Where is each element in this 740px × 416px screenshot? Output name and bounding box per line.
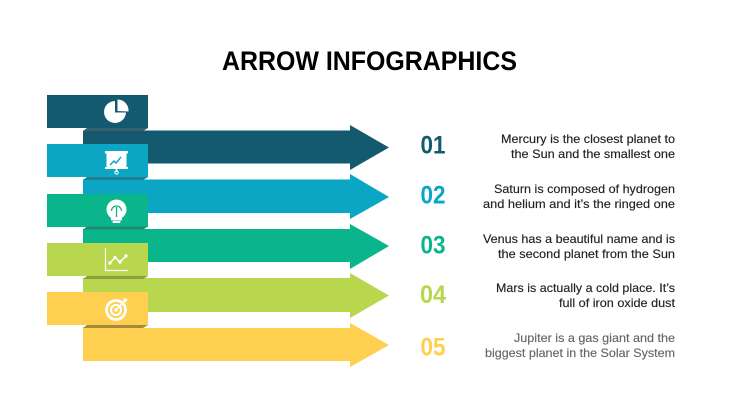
icon: brain bulb [106, 200, 126, 223]
number 03: 03 [420, 232, 446, 260]
tab 3 [47, 194, 148, 230]
description 5: Jupiter is a gas giant and the [514, 331, 675, 345]
icon: pie chart [104, 99, 129, 123]
icon: target [106, 298, 128, 320]
arrow 2 [83, 174, 389, 219]
description 3 [483, 232, 675, 261]
description 1: the Sun and the smallest one [511, 147, 675, 161]
arrow 4 [83, 273, 389, 318]
arrow 3 [83, 224, 389, 269]
tab 1 [47, 95, 148, 131]
tab 2 [47, 144, 148, 180]
description 4 [496, 281, 676, 310]
arrow 5 [83, 323, 389, 367]
description 4: full of iron oxide dust [559, 296, 676, 310]
title: ARROW INFOGRAPHICS [222, 46, 517, 76]
number 05: 05 [420, 334, 446, 362]
number 01: 01 [420, 132, 446, 160]
description 1: Mercury is the closest planet to [501, 132, 675, 146]
description 3: the second planet from the Sun [498, 247, 675, 261]
icon: presentation board [105, 151, 128, 174]
description 3: Venus has a beautiful name and is [483, 232, 675, 246]
icon: line chart [106, 248, 128, 270]
description 4: Mars is actually a cold place. It’s [496, 281, 675, 295]
description 2: Saturn is composed of hydrogen [494, 182, 675, 196]
tab 5 [47, 292, 148, 328]
description 2 [483, 182, 675, 211]
number 04: 04 [420, 281, 446, 309]
description 5 [485, 331, 675, 360]
tab 4 [47, 243, 148, 279]
description 1 [501, 132, 675, 161]
arrow 1 [83, 125, 389, 170]
number 02: 02 [420, 182, 446, 210]
description 5: biggest planet in the Solar System [485, 346, 675, 360]
description 2: and helium and it’s the ringed one [483, 197, 675, 211]
